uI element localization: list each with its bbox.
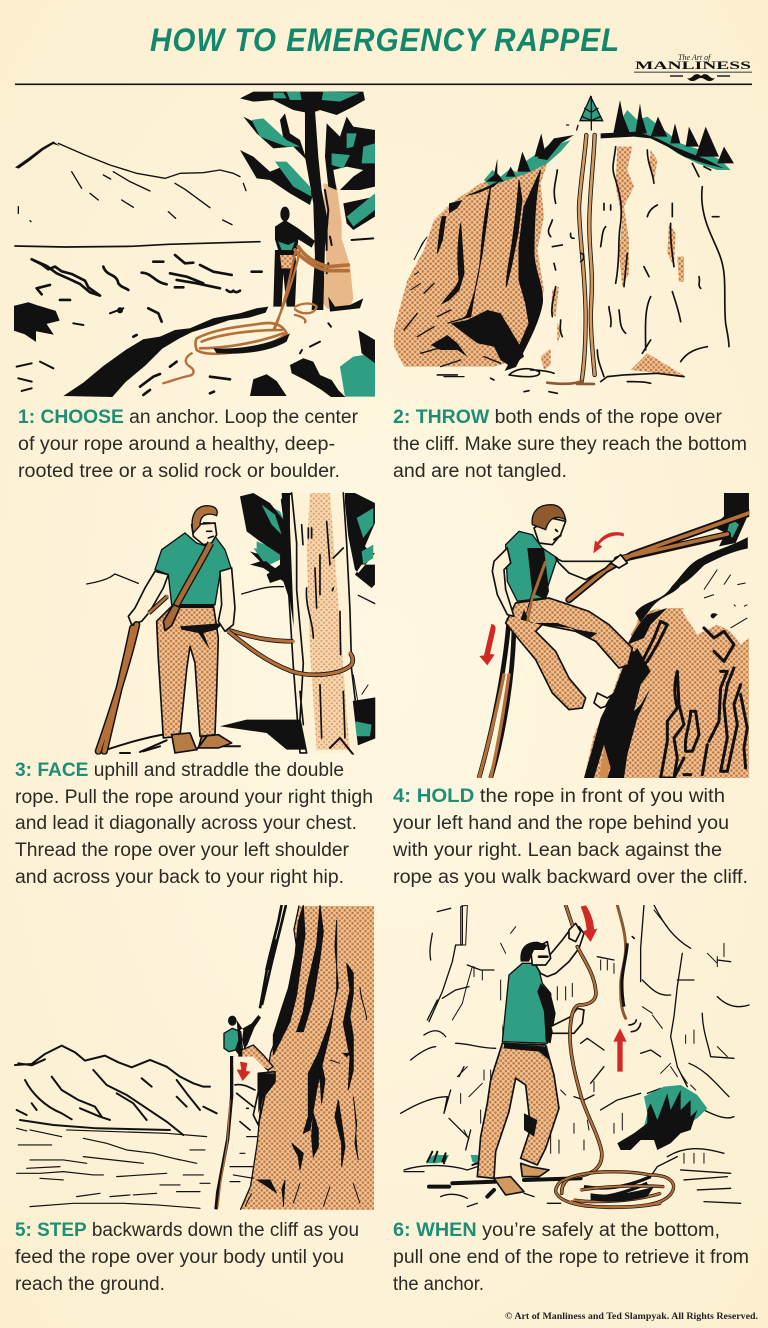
panel 2: throw the rope <box>393 97 747 482</box>
logo: The Art of Manliness <box>634 53 752 81</box>
caption 1: rooted tree or a solid rock or boulder. <box>18 461 340 482</box>
caption 5: feed the rope over your body until you <box>15 1247 344 1268</box>
caption 6: 6: WHEN you’re safely at the bottom, <box>393 1220 720 1241</box>
copyright footer: © Art of Manliness and Ted Slampyak. All Rights Reserved. <box>505 1311 758 1322</box>
caption 3: and lead it diagonally across your chest. <box>15 813 357 834</box>
caption 5 <box>15 1220 359 1295</box>
header rule <box>15 84 752 85</box>
illustration: small figure descending tall rock face <box>15 905 374 1210</box>
arrow: pull down <box>581 905 597 942</box>
caption 4: with your right. Lean back against the <box>392 840 722 861</box>
caption 2: and are not tangled. <box>393 461 567 482</box>
caption 2: the cliff. Make sure they reach the bottom <box>393 434 747 455</box>
caption 5: reach the ground. <box>15 1274 165 1295</box>
logo: The Art of Manliness: The Art of <box>678 53 712 62</box>
title: HOW TO EMERGENCY RAPPEL <box>150 22 620 58</box>
panel 5: step backwards <box>15 905 374 1295</box>
panel 6: retrieve the rope <box>393 905 749 1295</box>
panel 3: face uphill <box>15 493 375 888</box>
caption 5: 5: STEP backwards down the cliff as you <box>15 1220 359 1241</box>
caption 4 <box>392 786 748 888</box>
arrow: rope down <box>479 624 496 665</box>
arrow: rope rises <box>613 1028 627 1072</box>
caption 1: 1: CHOOSE an anchor. Loop the center <box>18 407 359 428</box>
caption 3: and across your back to your right hip. <box>15 867 344 888</box>
illustration: man straddling double rope beside a tree <box>87 493 375 755</box>
caption 4: your left hand and the rope behind you <box>393 813 729 834</box>
caption 2: 2: THROW both ends of the rope over <box>393 407 723 428</box>
caption 4: 4: HOLD the rope in front of you with <box>393 786 725 807</box>
illustration: man leaning back over cliff edge <box>479 493 749 778</box>
caption 4: rope as you walk backward over the cliff. <box>393 867 748 888</box>
caption 1: of your rope around a healthy, deep- <box>18 434 335 455</box>
caption 3 <box>15 760 373 888</box>
caption 6 <box>393 1220 749 1295</box>
caption 3: rope. Pull the rope around your right thigh <box>15 787 373 808</box>
caption 1 <box>18 407 359 482</box>
panel 1: choose an anchor <box>15 92 375 482</box>
caption 6: the anchor. <box>393 1274 484 1295</box>
caption 3: Thread the rope over your left shoulder <box>15 840 350 861</box>
caption 3: 3: FACE uphill and straddle the double <box>15 760 344 781</box>
logo: The Art of Manliness: MANLINESS <box>635 58 752 72</box>
caption 2 <box>393 407 747 482</box>
illustration: man pulling rope at cliff base <box>401 905 749 1207</box>
arrow: pull rope forward <box>593 532 624 553</box>
panel 4: hold the rope <box>392 493 749 888</box>
caption 6: pull one end of the rope to retrieve it from <box>393 1247 749 1268</box>
illustration: man looping rope around tree on a mountain ledge <box>15 92 375 400</box>
illustration: ropes hanging down a cliff <box>394 97 734 393</box>
